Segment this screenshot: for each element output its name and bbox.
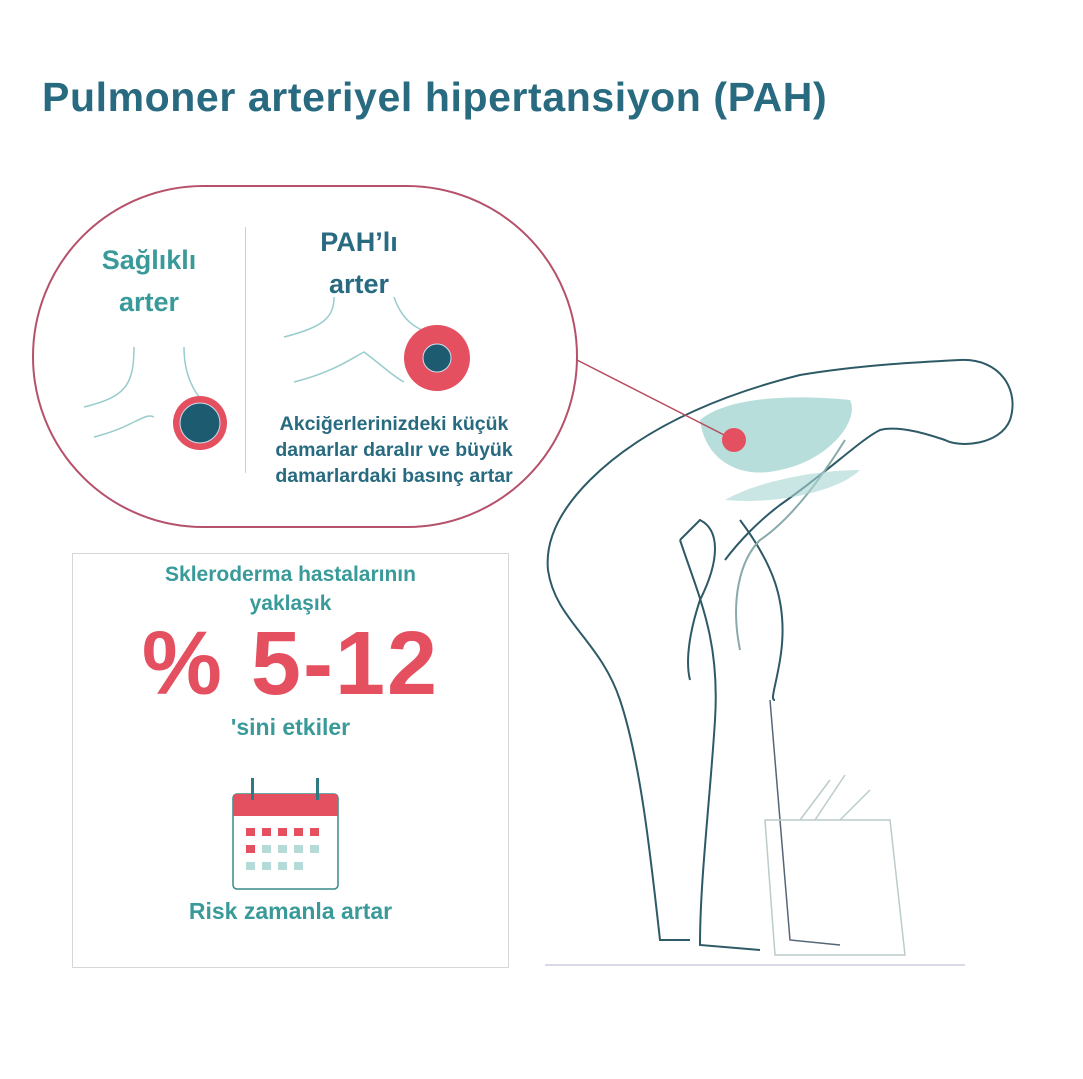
text: risk: Risk zamanla artar xyxy=(189,898,392,924)
heading: healthy artery: arter xyxy=(119,287,179,317)
text: stat intro: yaklaşık xyxy=(250,592,331,615)
text: stat intro: Skleroderma hastalarının xyxy=(165,563,416,586)
text: PAH description: Akciğerlerinizdeki küçük damarlar daralır ve büyük damarlardaki basınç artar xyxy=(275,413,513,487)
heading: PAH artery: PAH’lı xyxy=(320,227,398,257)
title: Pulmoner arteriyel hipertansiyon (PAH) xyxy=(42,74,827,120)
bag xyxy=(765,775,905,955)
heading: PAH artery xyxy=(320,227,398,299)
icon: calendar xyxy=(232,778,339,890)
panel: artery comparison bubble xyxy=(32,185,578,528)
lungs xyxy=(700,397,860,501)
icon: healthy artery xyxy=(84,347,227,450)
big number: % 5-12 xyxy=(142,614,439,714)
callout connector xyxy=(577,360,734,440)
divider xyxy=(245,227,246,473)
heading: healthy artery: Sağlıklı xyxy=(102,245,196,275)
text: affects: 'sini etkiler xyxy=(231,714,350,740)
panel: statistics box xyxy=(72,553,509,968)
text: stat intro xyxy=(165,563,416,615)
icon: PAH artery xyxy=(284,297,470,391)
heading: PAH artery: arter xyxy=(329,269,389,299)
heading: healthy artery xyxy=(102,245,196,317)
